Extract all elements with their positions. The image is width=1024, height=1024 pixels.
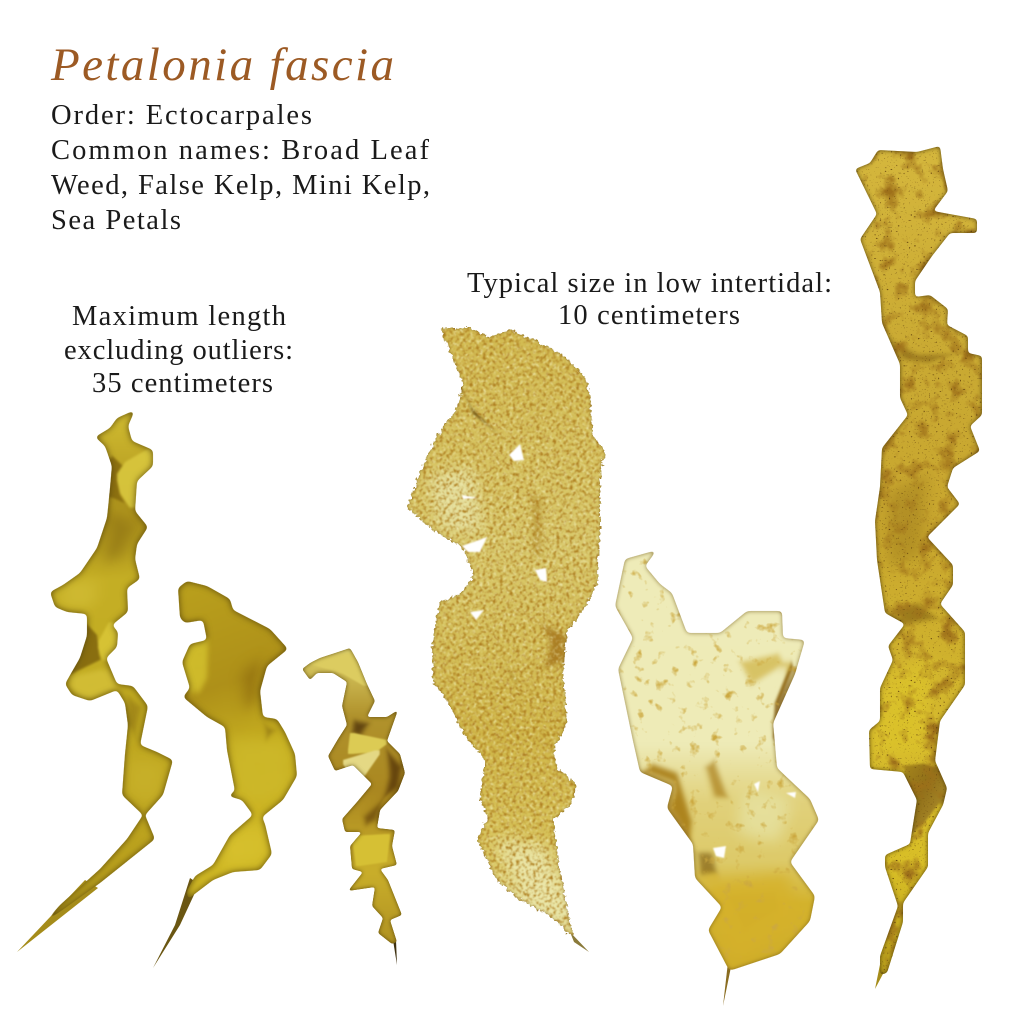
- specimen 2: wide-topped blade: [153, 581, 297, 968]
- holes in specimen 5: [713, 781, 796, 858]
- specimen 5: pale blade with golden base: [615, 550, 819, 1006]
- caption: maximum length: 35 centimeters: [92, 368, 273, 399]
- caption: typical size: 10 centimeters: [558, 300, 740, 331]
- text block: taxonomy and common names: Sea Petals: [51, 205, 181, 236]
- text block: taxonomy and common names: Weed, False Kelp, Mini Kelp,: [51, 170, 430, 201]
- specimen 4: broad pale speckled blade: [407, 325, 605, 952]
- specimen 6: tall ruffled blade far right: [855, 146, 982, 989]
- specimen 3: small ruffled blade: [302, 648, 405, 965]
- caption: typical size: [467, 268, 832, 331]
- title: Petalonia fascia: [50, 39, 394, 91]
- text block: taxonomy and common names: Common names: Broad Leaf: [51, 135, 430, 166]
- text block: taxonomy and common names: Order: Ectocarpales: [51, 100, 312, 131]
- caption: maximum length: excluding outliers:: [64, 335, 293, 366]
- caption: maximum length: Maximum length: [72, 301, 286, 332]
- specimen 1: narrow blade far left: [17, 410, 173, 952]
- caption: typical size: Typical size in low intertidal:: [467, 268, 832, 299]
- text block: taxonomy and common names: [51, 100, 430, 236]
- caption: maximum length: [64, 301, 293, 399]
- holes in specimen 4: [462, 444, 547, 620]
